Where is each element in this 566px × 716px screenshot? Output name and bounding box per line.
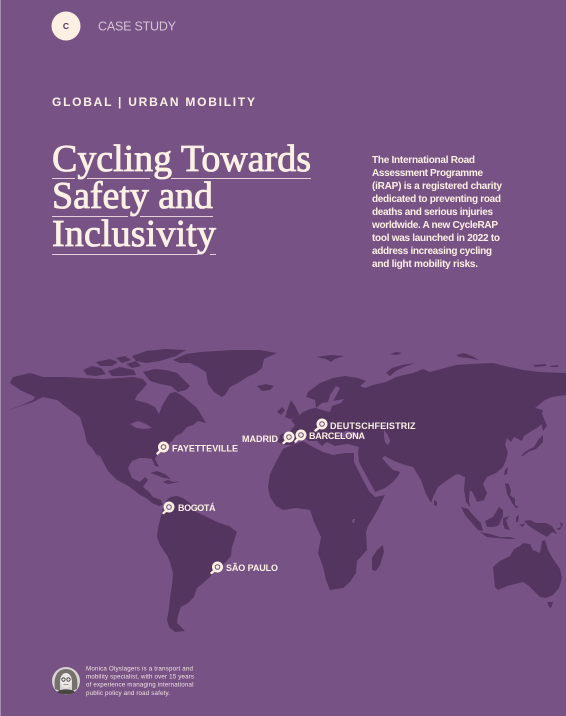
Svalbard and Arctic islands — [316, 352, 558, 367]
text block: iRAP introduction: worldwide. A new CycleRAP — [371, 220, 498, 231]
world map — [6, 349, 566, 632]
text block: iRAP introduction: Assessment Programme — [372, 168, 483, 179]
Madagascar — [372, 545, 384, 571]
South America — [157, 496, 237, 632]
text block: iRAP introduction: tool was launched in 2022 to — [372, 233, 500, 244]
icon: case study badge: C — [63, 21, 69, 31]
Philippines — [505, 483, 519, 508]
text block: iRAP introduction: and light mobility risks. — [372, 259, 478, 270]
inland seas on the map — [97, 386, 390, 523]
Hispaniola and Jamaica — [163, 480, 179, 484]
pin: Bogotá — [164, 502, 216, 513]
New Britain — [556, 522, 563, 530]
New Guinea — [524, 520, 557, 537]
title: Inclusivity — [52, 213, 216, 255]
pin: Fayetteville — [158, 442, 238, 454]
author bio — [86, 666, 194, 697]
title: Cycling Towards — [52, 138, 311, 180]
North and Central America — [6, 373, 206, 506]
text block: iRAP introduction: (iRAP) is a registered charity — [372, 181, 502, 192]
Sumatra — [461, 507, 483, 531]
text block: iRAP introduction: The International Road — [372, 155, 475, 166]
title — [52, 138, 311, 255]
Sakhalin — [540, 410, 547, 431]
pin: São Paulo — [212, 562, 278, 573]
pin: Madrid: MADRID — [242, 434, 278, 444]
icon: case study badge — [52, 12, 80, 40]
pin: Deutschfeistriz — [316, 418, 416, 431]
heading: global urban mobility: GLOBAL | URBAN MOBILITY — [52, 95, 255, 109]
Africa — [268, 441, 385, 590]
Sulawesi — [503, 516, 510, 530]
Australia — [493, 540, 562, 598]
pin: Barcelona: BARCELONA — [309, 431, 366, 441]
Tasmania — [547, 602, 553, 608]
Moluccas — [516, 515, 525, 527]
Borneo — [485, 507, 503, 527]
Java and Lesser Sunda — [480, 532, 516, 539]
pin: Madrid — [242, 432, 294, 444]
pin: São Paulo: SÃO PAULO — [226, 563, 278, 573]
Arctic Canadian islands — [83, 349, 190, 392]
pin: Bogotá: BOGOTÁ — [178, 503, 216, 513]
Japan — [521, 435, 543, 456]
title: Safety and — [52, 175, 213, 217]
text block: iRAP introduction: deaths and serious injuries — [372, 207, 493, 218]
section label: case study: CASE STUDY — [98, 20, 177, 34]
Iceland — [257, 384, 274, 391]
author bio: mobility specialist, with over 15 years — [86, 674, 194, 680]
text block: iRAP introduction: dedicated to preventing road — [372, 194, 501, 205]
text block: iRAP introduction — [371, 155, 502, 270]
text block: iRAP introduction: address increasing cycling — [372, 246, 492, 257]
pin: Deutschfeistriz: DEUTSCHFEISTRIZ — [330, 421, 416, 431]
author bio: public policy and road safety. — [86, 690, 170, 697]
Sri Lanka and Taiwan — [434, 467, 508, 506]
author bio: Monica Olyslagers is a transport and — [86, 666, 194, 672]
pin: Fayetteville: FAYETTEVILLE — [172, 444, 238, 454]
Novaya Zemlya — [386, 363, 415, 376]
Eurasia — [278, 363, 566, 507]
Cuba — [150, 471, 171, 479]
author portrait — [52, 667, 80, 695]
UK and Ireland — [277, 400, 299, 419]
pin: Barcelona — [296, 430, 366, 442]
Greenland — [173, 350, 277, 397]
author bio: of experience managing international — [86, 682, 194, 689]
